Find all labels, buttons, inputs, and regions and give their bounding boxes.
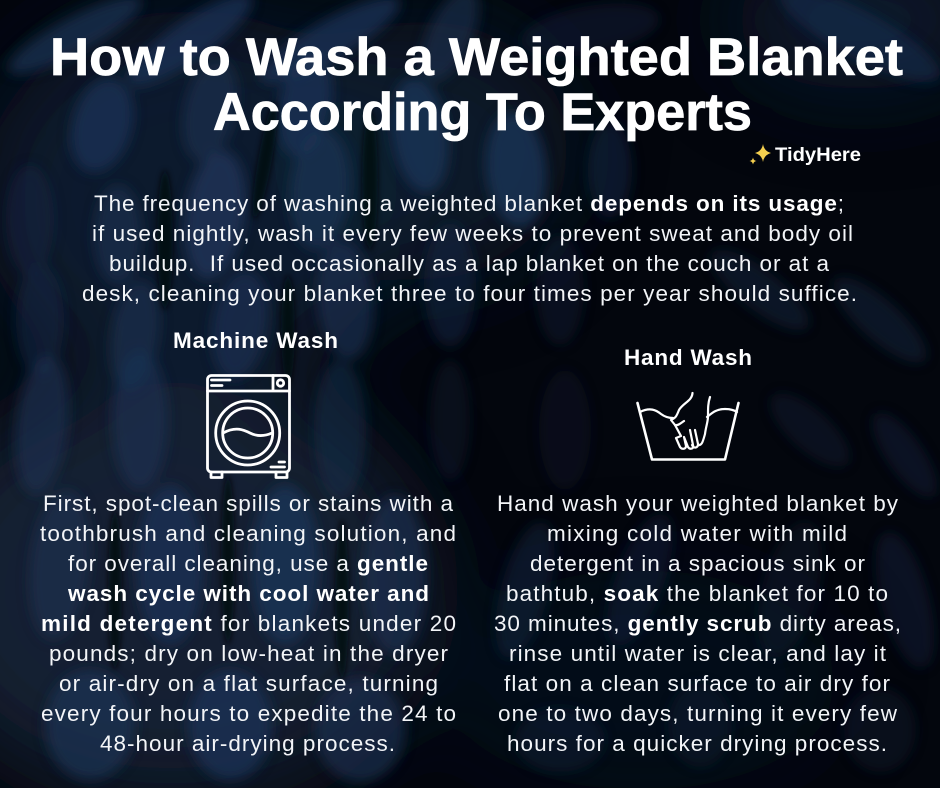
icon: washing machine xyxy=(208,376,290,478)
body text: hand wash: bathtub, soak the blanket for 10 to xyxy=(506,581,888,606)
body text: hand wash: rinse until water is clear, and lay it xyxy=(509,641,887,666)
body text: hand wash: Hand wash your weighted blanket by xyxy=(497,491,899,516)
body text: machine wash: pounds; dry on low-heat in the dryer xyxy=(49,641,448,666)
body text: machine wash: First, spot-clean spills or stains with a xyxy=(43,491,453,516)
panel: hand wash xyxy=(494,345,901,756)
intro text block xyxy=(82,191,857,306)
body text: hand wash xyxy=(494,491,901,756)
body text: machine wash: 48-hour air-drying process. xyxy=(100,731,395,756)
body text: machine wash: every four hours to expedite the 24 to xyxy=(41,701,456,726)
body text: machine wash: toothbrush and cleaning solution, and xyxy=(40,521,456,546)
title: How to Wash a Weighted Blanket xyxy=(50,28,903,87)
icon: yellow sparkle xyxy=(750,144,771,164)
body text: hand wash: flat on a clean surface to air dry for xyxy=(504,671,890,696)
body text: hand wash: detergent in a spacious sink or xyxy=(530,551,866,576)
body text: hand wash: one to two days, turning it every few xyxy=(498,701,898,726)
intro text block: desk, cleaning your blanket three to four times per year should suffice. xyxy=(82,281,857,306)
title: According To Experts xyxy=(213,83,752,142)
heading: machine wash: Machine Wash xyxy=(173,328,338,353)
panel: machine wash xyxy=(40,328,456,756)
body text: machine wash xyxy=(40,491,456,756)
icon: hand in wash basin xyxy=(638,393,738,460)
title xyxy=(50,28,903,142)
intro text block: if used nightly, wash it every few weeks to prevent sweat and body oil xyxy=(92,221,853,246)
logo: TidyHere: TidyHere xyxy=(775,145,861,166)
body text: machine wash: mild detergent for blankets under 20 xyxy=(41,611,456,636)
body text: machine wash: for overall cleaning, use a gentle xyxy=(68,551,428,576)
body text: machine wash: or air-dry on a flat surface, turning xyxy=(59,671,438,696)
body text: hand wash: 30 minutes, gently scrub dirty areas, xyxy=(494,611,901,636)
body text: machine wash: wash cycle with cool water and xyxy=(67,581,429,606)
heading: hand wash: Hand Wash xyxy=(624,345,752,370)
intro text block: buildup. If used occasionally as a lap blanket on the couch or at a xyxy=(109,251,829,276)
intro text block: The frequency of washing a weighted blanket depends on its usage; xyxy=(94,191,844,216)
body text: hand wash: hours for a quicker drying process. xyxy=(507,731,887,756)
body text: hand wash: mixing cold water with mild xyxy=(547,521,847,546)
logo: TidyHere xyxy=(750,144,861,166)
